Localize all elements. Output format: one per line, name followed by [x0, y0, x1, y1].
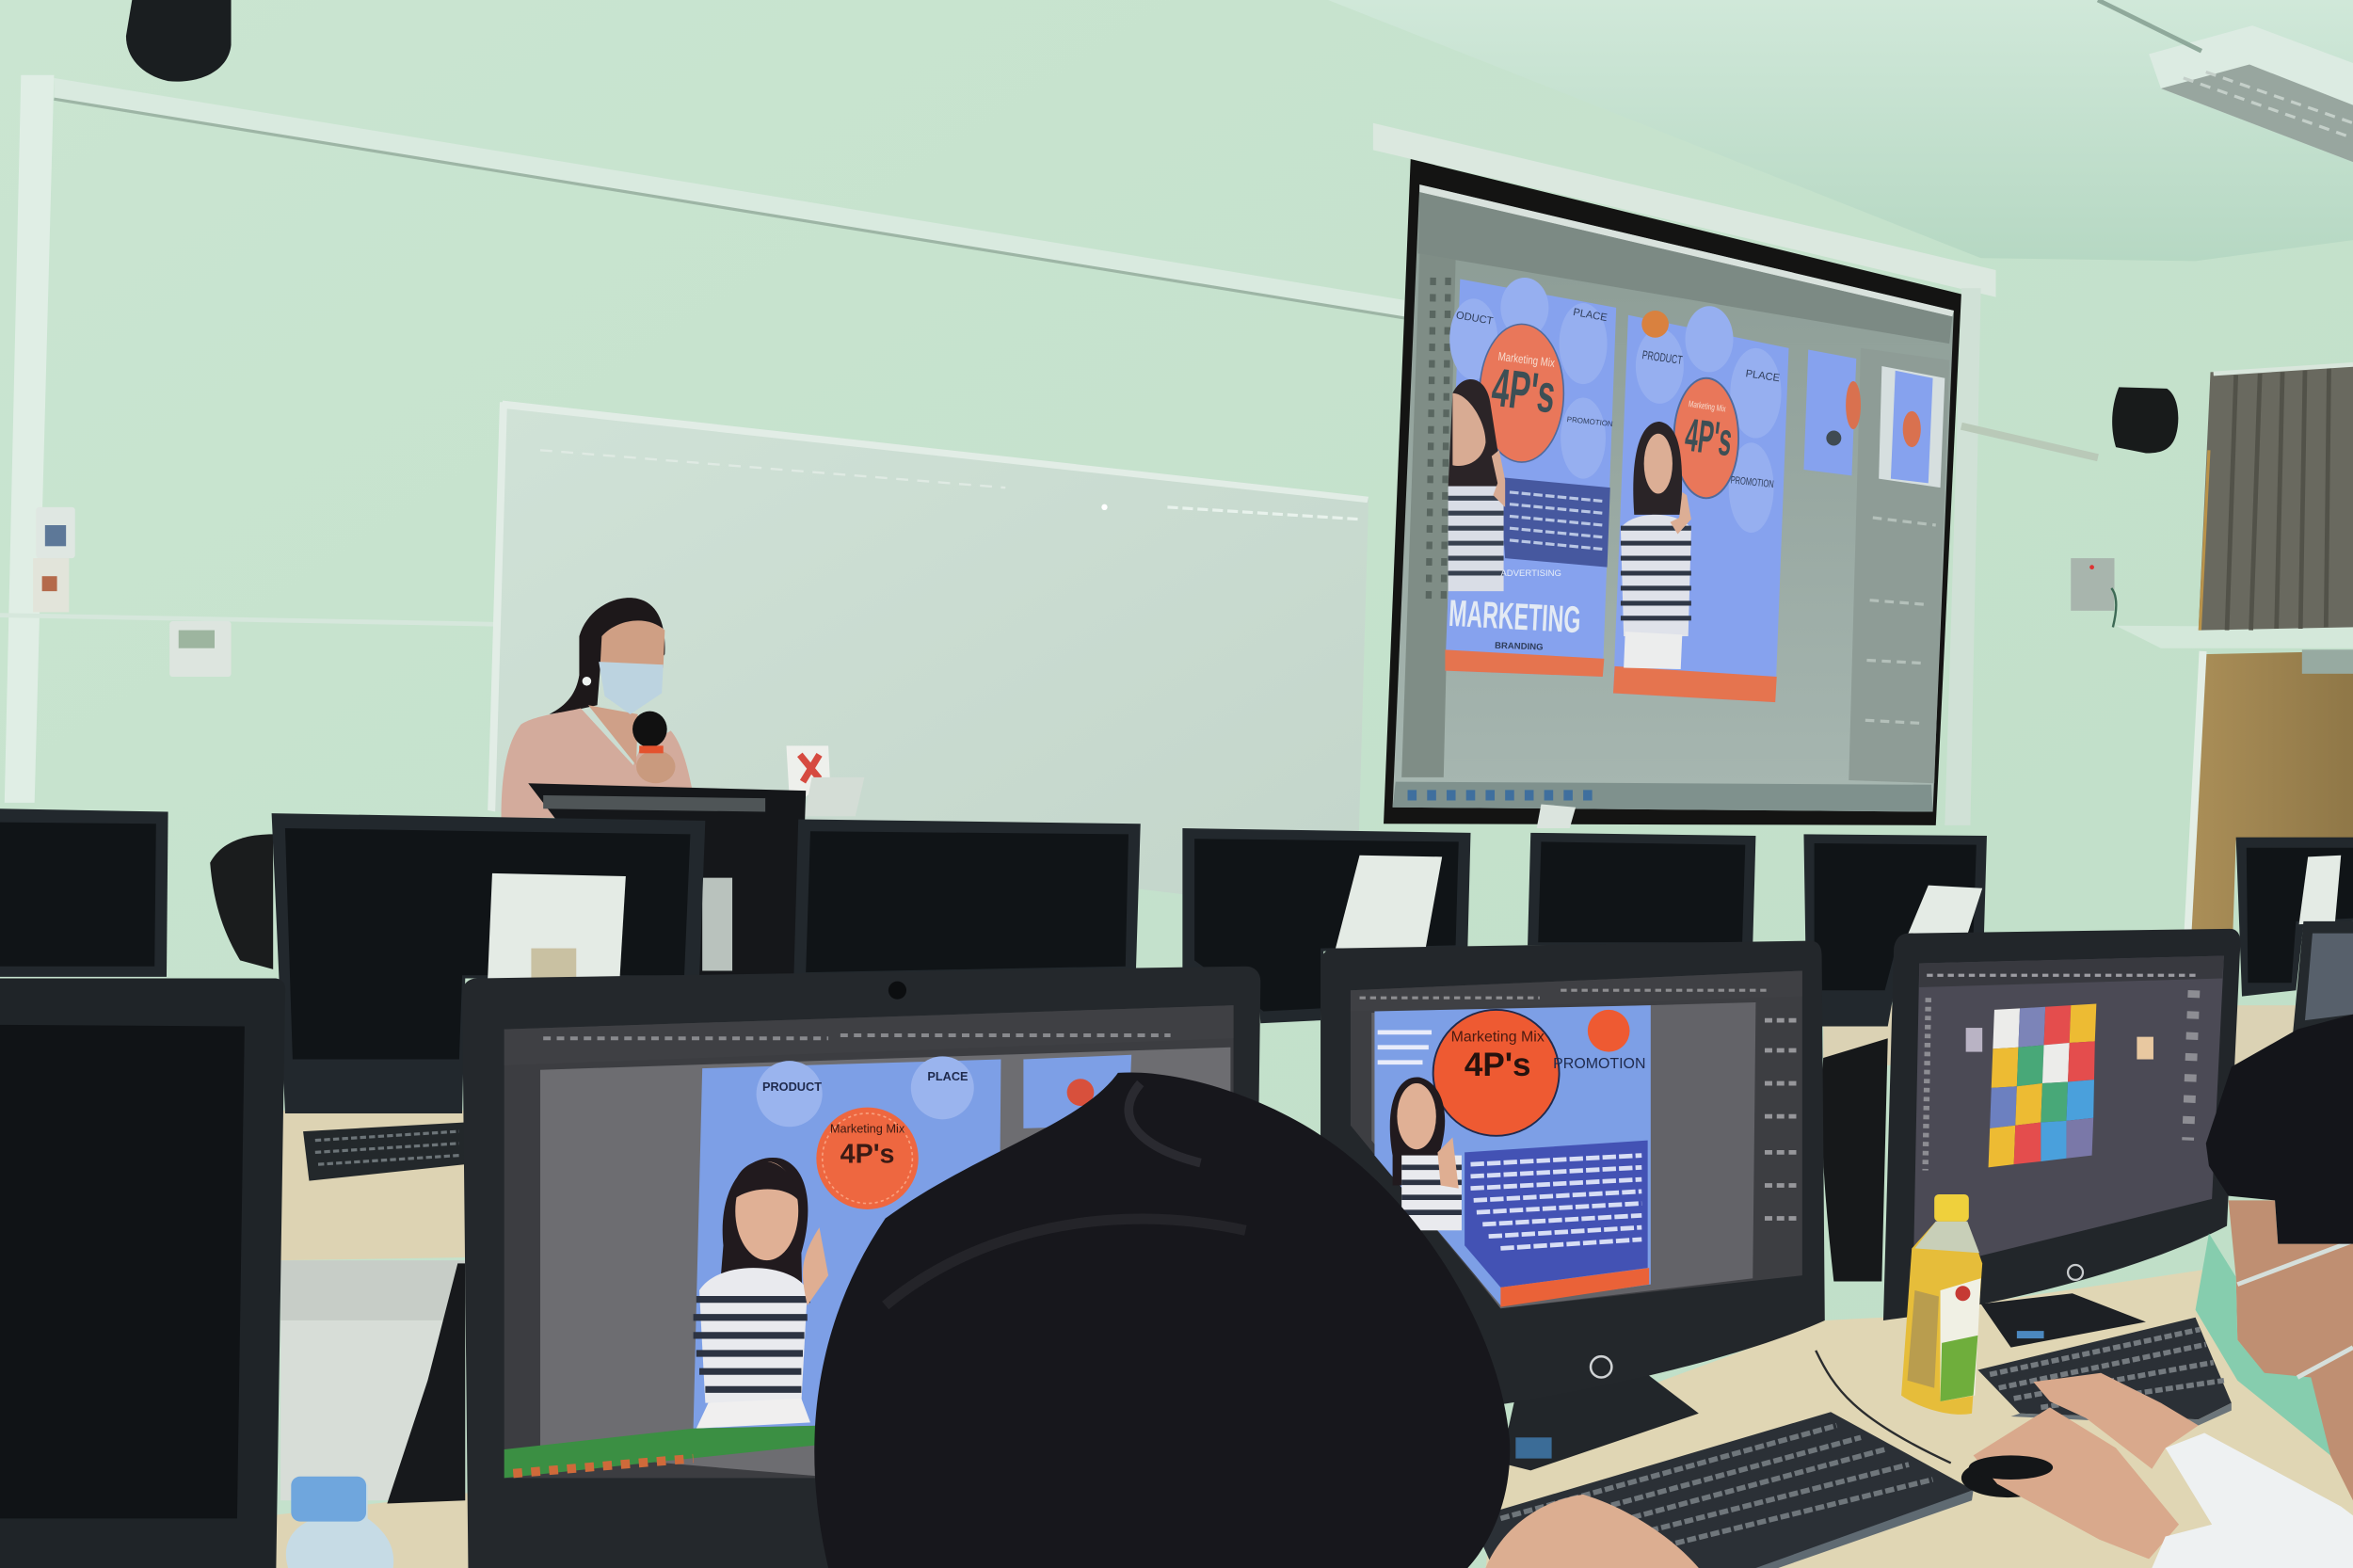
right side panel — [1849, 348, 1949, 783]
speaker: right wall — [2112, 387, 2178, 453]
orange circle — [1674, 378, 1738, 498]
back monitor 6 — [1803, 834, 1987, 1026]
ceiling — [1328, 0, 2353, 261]
small poster — [1023, 1055, 1131, 1128]
label: marketing mix: Marketing Mix — [1451, 1029, 1545, 1045]
projector screen — [1384, 159, 1961, 825]
right panel — [1765, 1020, 1798, 1219]
red cross sign — [786, 745, 864, 816]
taskbar — [1393, 782, 1933, 811]
marketing graphic: MARKETING — [1448, 593, 1582, 641]
label: product: ODUCT — [1455, 310, 1494, 328]
screen — [1913, 956, 2224, 1272]
mask straps — [2237, 1240, 2353, 1378]
preview poster left — [1445, 278, 1616, 677]
woman figure — [1633, 422, 1682, 515]
white top edge — [1419, 184, 1954, 316]
canvas grey — [540, 1048, 1230, 1478]
presenter — [502, 598, 692, 818]
presenter monitor — [528, 783, 806, 975]
screen — [504, 1005, 1234, 1478]
front desk — [270, 1270, 2353, 1568]
wall sockets and thermostat — [33, 507, 232, 677]
heading: marketing mix: Marketing Mix — [1497, 349, 1556, 370]
preview poster right — [1613, 306, 1789, 702]
poster — [1374, 1005, 1651, 1305]
face mask — [599, 662, 664, 714]
window sill — [2116, 626, 2353, 648]
ceiling light — [2098, 0, 2353, 162]
label: promotion: PROMOTION — [1730, 474, 1774, 490]
cable — [1816, 1351, 1951, 1463]
label: place: PLACE — [1572, 307, 1609, 324]
menu bar — [1351, 970, 1802, 1012]
heading: 4P's: 4P's — [840, 1140, 894, 1170]
poster circles — [1636, 306, 1782, 533]
orange circle — [816, 1108, 919, 1209]
back monitor 1 — [0, 808, 168, 977]
brand logo — [1591, 1356, 1611, 1378]
hand upper — [2033, 1373, 2199, 1469]
label: promotion: PROMOTION — [1553, 1056, 1645, 1072]
poster — [694, 1060, 1000, 1429]
back monitor 7 — [2236, 838, 2353, 997]
menu bar — [1919, 956, 2224, 987]
orange circle — [1480, 324, 1563, 462]
heading fragment — [1378, 1032, 1432, 1063]
icon grid artwork — [1989, 1004, 2096, 1167]
bezel — [1321, 941, 1825, 1404]
hand lower — [1974, 1407, 2179, 1559]
label: marketing mix: Marketing Mix — [830, 1122, 905, 1136]
drink bottle — [1901, 1194, 1982, 1415]
back monitor 2 — [272, 813, 705, 1113]
webcam — [888, 982, 906, 1000]
back monitor 5 — [1528, 833, 1755, 945]
paper card below screen — [1537, 805, 1576, 828]
wooden door — [2188, 649, 2353, 930]
far right monitor stand — [1981, 1293, 2146, 1348]
far right keyboard — [1977, 1318, 2232, 1426]
paper note on monitor — [488, 873, 626, 978]
screen — [1351, 970, 1802, 1308]
advertising label: ADVERTISING — [1500, 568, 1561, 579]
heading: 4P's: 4P's — [1465, 1047, 1531, 1083]
orange circle — [1433, 1010, 1560, 1136]
shirt sleeve — [2152, 1433, 2353, 1568]
orange strip — [1500, 1268, 1649, 1307]
presenter neck — [588, 705, 638, 765]
presenter blouse — [502, 708, 692, 818]
front right keyboard — [1470, 1412, 1974, 1568]
back monitor 3 — [793, 819, 1141, 975]
poster circles — [1449, 278, 1608, 479]
water bottle — [286, 1477, 393, 1568]
mask — [2196, 1233, 2330, 1455]
wall box — [2071, 558, 2116, 627]
back monitor 8 — [2293, 921, 2353, 1032]
woman figure — [1449, 379, 1500, 488]
paper note on monitor 4 — [1336, 856, 1442, 949]
left tools — [1926, 998, 1929, 1171]
desk: middle row left — [280, 1111, 465, 1500]
taskbar — [504, 1426, 833, 1478]
hair — [2206, 1015, 2353, 1244]
label: marketing mix: Marketing Mix — [1688, 399, 1726, 415]
label: promotion: PROMOTION — [1566, 415, 1613, 428]
small art right — [2137, 1037, 2153, 1060]
whiteboard — [488, 401, 1369, 915]
computer mouse overlap — [1969, 1455, 2053, 1480]
computer mouse — [1961, 1459, 2055, 1497]
label: place: PLACE — [1745, 368, 1781, 384]
heading: 4P's: 4P's — [1683, 409, 1735, 466]
heading: 4P's: 4P's — [1489, 358, 1559, 425]
desk: right middle — [1823, 1005, 2353, 1065]
label: place: PLACE — [927, 1069, 968, 1083]
front right monitor stand — [1500, 1366, 1699, 1470]
bezel — [462, 967, 1260, 1568]
speaker: top left — [126, 0, 232, 82]
menu bar — [504, 1005, 1234, 1065]
far right monitor — [1883, 929, 2240, 1320]
label: product: PRODUCT — [762, 1080, 822, 1094]
application menu bar — [1418, 192, 1952, 344]
microphone — [632, 712, 667, 753]
purple text block — [1465, 1141, 1648, 1288]
poster woman — [694, 1158, 828, 1429]
earring — [583, 677, 591, 686]
branding label: BRANDING — [1495, 641, 1544, 653]
brand logo — [2068, 1265, 2083, 1280]
presenter ponytail and hair — [550, 598, 664, 714]
orange icon badge — [1641, 311, 1669, 338]
back keyboard — [303, 1123, 465, 1181]
tool icons — [1429, 278, 1449, 600]
student: foreground head — [814, 1072, 1510, 1568]
chair back right — [1822, 1038, 1888, 1281]
projector screen housing — [1373, 123, 2098, 825]
face skin — [2229, 1200, 2353, 1500]
poster woman — [1390, 1077, 1462, 1230]
navigator thumbnail — [1879, 366, 1945, 488]
student: foreground hand — [1485, 1495, 1699, 1568]
front right monitor — [1321, 941, 1825, 1404]
right panel — [2188, 990, 2194, 1141]
small poster — [1803, 349, 1861, 475]
bezel — [1883, 929, 2240, 1320]
presenter hand — [636, 750, 675, 783]
tool strip — [1401, 253, 1456, 777]
presenter face — [600, 620, 664, 667]
wall rail — [54, 78, 1404, 318]
small circles — [757, 1056, 974, 1127]
canvas — [1371, 1002, 1755, 1308]
badge — [1588, 1010, 1630, 1052]
label: product: PRODUCT — [1641, 347, 1684, 367]
left pillar — [0, 75, 495, 803]
student: right side — [1969, 1015, 2353, 1568]
back monitor 4 — [1182, 828, 1470, 1023]
front center monitor — [462, 967, 1260, 1568]
office chair — [210, 834, 273, 969]
front monitor left — [0, 978, 285, 1568]
panel controls — [1865, 518, 1936, 723]
right wall detail: window blinds — [2199, 364, 2353, 631]
small art left — [1966, 1028, 1982, 1052]
chair silhouette — [387, 1263, 465, 1503]
